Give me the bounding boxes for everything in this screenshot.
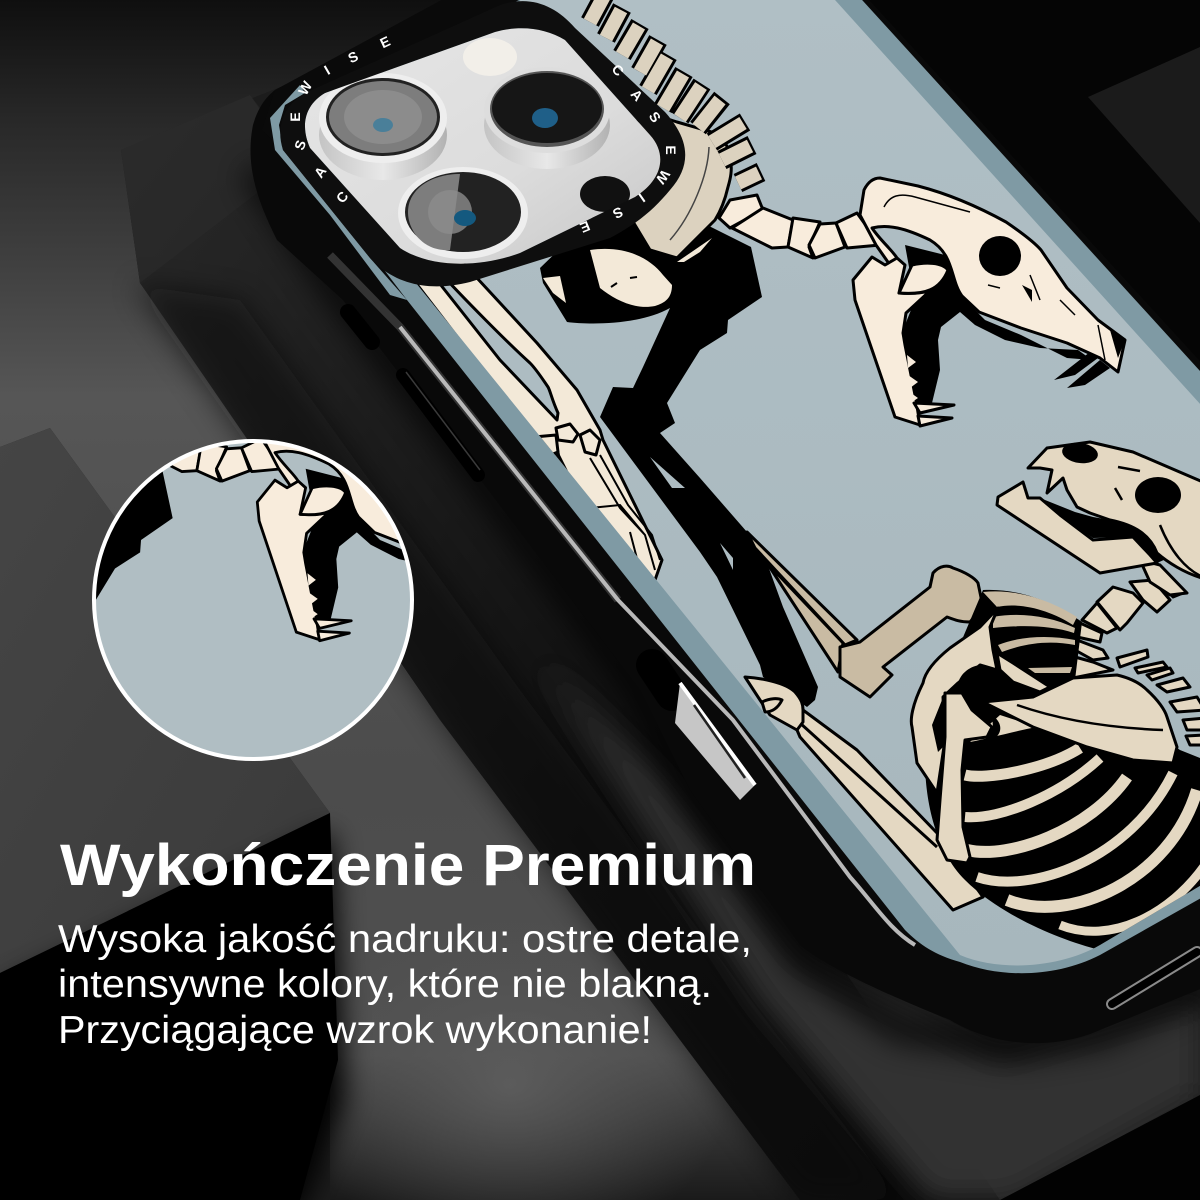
ring branding left: E: [377, 33, 393, 51]
body text: Przyciągające wzrok wykonanie!: [58, 1009, 652, 1052]
lens top-left: [319, 73, 447, 180]
body text: Wysoka jakość nadruku: ostre detale,: [58, 918, 752, 961]
lower jaw 2: [997, 482, 1157, 573]
rear thigh knob: [543, 249, 672, 307]
pelvis: [629, 118, 733, 262]
frame top corner: [262, 0, 540, 150]
neck vertebrae front: [1073, 577, 1183, 678]
throat and teeth: [903, 245, 1092, 403]
rib under scapula: [970, 715, 1037, 742]
forearm lower: [797, 710, 983, 910]
ring branding right: C: [609, 61, 627, 79]
wolf skull 2: [997, 441, 1200, 595]
lower fangs: [914, 403, 954, 426]
front paw: [745, 677, 803, 730]
rear arm bones: [402, 262, 662, 583]
silver edge highlight: [400, 327, 915, 945]
camera module: [262, 0, 685, 300]
ring branding right: [578, 61, 679, 236]
tibia bones: [747, 532, 857, 672]
spine spikes: [590, 0, 761, 183]
spine spikes front: [1117, 650, 1200, 745]
lens bottom: [398, 167, 528, 259]
phone case body: [250, 0, 1200, 1048]
bottom charging port: [1112, 952, 1197, 1004]
printed screen panel: [268, 0, 1200, 973]
heading: Wykończenie Premium: [60, 833, 756, 898]
humerus bone: [840, 566, 983, 697]
upper fangs: [1054, 352, 1110, 388]
ring branding left: I: [321, 62, 333, 78]
ring branding right: E: [663, 145, 679, 155]
microphone hole: [580, 176, 630, 212]
ring branding right: A: [628, 86, 646, 104]
lower ribs: [965, 748, 1200, 931]
ring branding right: S: [610, 204, 626, 222]
skeleton artwork: [402, 0, 1200, 950]
ring branding right: E: [578, 218, 592, 236]
silver side button: [652, 665, 755, 800]
lower teeth: [907, 355, 918, 402]
large scapula: [983, 675, 1177, 763]
detail zoom circle: [92, 439, 414, 761]
body text: [58, 918, 752, 1052]
cranium: [860, 178, 1125, 372]
neck base under skull: [1140, 560, 1187, 595]
blue sliver beside ring: [270, 85, 407, 300]
black silhouette legs: [540, 210, 818, 707]
collar bone: [999, 656, 1047, 690]
ring branding left: S: [291, 138, 309, 152]
body text: intensywne kolory, które nie blakną.: [58, 963, 712, 1006]
upper ribs: [983, 591, 1077, 673]
lower jaw: [853, 257, 945, 425]
ring branding left: C: [333, 188, 351, 206]
ring branding left: W: [295, 78, 316, 98]
ring branding right: I: [636, 190, 648, 206]
lens right: [484, 67, 610, 169]
ring branding right: S: [646, 109, 664, 125]
blue gap between bones: [440, 285, 560, 422]
neck vertebrae rear: [719, 195, 880, 258]
ring branding left: E: [287, 112, 303, 122]
eye socket: [979, 236, 1021, 276]
flash: [463, 38, 517, 76]
mouth dark back: [1044, 500, 1164, 562]
ring branding left: S: [345, 48, 361, 66]
ring branding right: W: [652, 167, 673, 188]
front shoulder blade curve: [910, 606, 999, 789]
glass backing: [305, 28, 660, 264]
ring branding left: [287, 33, 393, 206]
wolf skull 1: [853, 178, 1125, 426]
front upper arm: [937, 693, 992, 863]
volume button slots: [348, 312, 480, 475]
nostril and skull lines: [1022, 285, 1032, 302]
skull top: [1028, 442, 1200, 580]
side edge sheen: [330, 255, 618, 600]
ring branding left: A: [311, 163, 329, 181]
ribcage: [925, 590, 1200, 950]
black lens guard ring: [280, 1, 685, 286]
